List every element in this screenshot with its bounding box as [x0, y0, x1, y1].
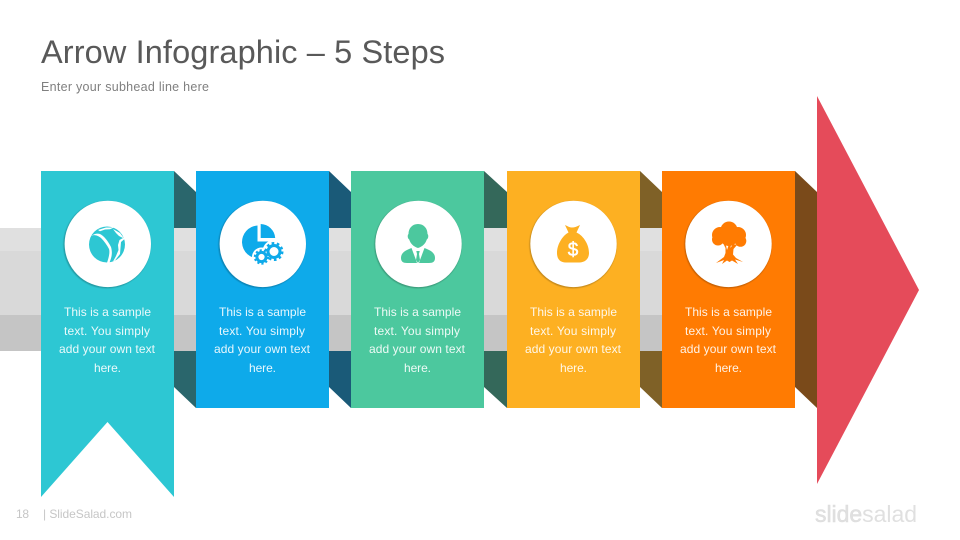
- step 4 text: here.: [560, 361, 587, 375]
- step 2 text: here.: [249, 361, 276, 375]
- icon circle: [529, 201, 617, 288]
- step 3 text: here.: [404, 361, 431, 375]
- step 2 text: text. You simply: [219, 324, 305, 338]
- step 5 text: This is a sample: [685, 305, 772, 319]
- title: Arrow Infographic – 5 Steps: [41, 34, 445, 70]
- step 4 text: This is a sample: [530, 305, 617, 319]
- step 3 text: [369, 305, 466, 375]
- step 5 text: [680, 305, 777, 375]
- card background: [196, 171, 329, 408]
- icon circle: [63, 201, 151, 288]
- card background: [662, 171, 795, 408]
- icon circle: [374, 201, 462, 288]
- panel: step 1 ribbon card: [41, 171, 174, 497]
- step 3 text: text. You simply: [374, 324, 460, 338]
- step 1 text: text. You simply: [64, 324, 150, 338]
- icon: money bag: [557, 225, 589, 262]
- step 4 text: add your own text: [525, 342, 622, 356]
- step 2 text: This is a sample: [219, 305, 306, 319]
- panel: step 5 card: [662, 171, 795, 408]
- step 1 text: This is a sample: [64, 305, 151, 319]
- step 3 text: This is a sample: [374, 305, 461, 319]
- step 4 text: [525, 305, 622, 375]
- card background: [507, 171, 640, 408]
- footer site name: | SlideSalad.com: [43, 507, 132, 521]
- step 3 text: add your own text: [369, 342, 466, 356]
- step 5 text: here.: [715, 361, 742, 375]
- icon circle: [684, 201, 772, 288]
- logo: slidesalad: slidesalad: [815, 501, 917, 527]
- footer page number: 18: [16, 507, 29, 521]
- ribbon background: [41, 171, 174, 497]
- icon: pie chart with gears: [242, 224, 286, 266]
- grey horizontal arrow shaft: [0, 228, 817, 351]
- icon: tree: [712, 222, 746, 264]
- step 1 text: add your own text: [59, 342, 156, 356]
- step 5 text: add your own text: [680, 342, 777, 356]
- icon: money bag: $: [568, 240, 579, 261]
- step 2 text: add your own text: [214, 342, 311, 356]
- step 2 text: [214, 305, 311, 375]
- card background: [351, 171, 484, 408]
- fold shadows between cards: [174, 171, 817, 408]
- step 1 text: here.: [94, 361, 121, 375]
- subhead: Enter your subhead line here: [41, 80, 209, 94]
- icon: globe: [89, 226, 125, 263]
- step 4 text: text. You simply: [530, 324, 616, 338]
- panel: step 4 card: [507, 171, 640, 408]
- icon circle: [218, 201, 306, 288]
- panel: step 2 card: [196, 171, 329, 408]
- step 5 text: text. You simply: [685, 324, 771, 338]
- icon: business person: [401, 224, 435, 263]
- step 1 text: [59, 305, 156, 375]
- red arrow head: [817, 96, 919, 484]
- panel: step 3 card: [351, 171, 484, 408]
